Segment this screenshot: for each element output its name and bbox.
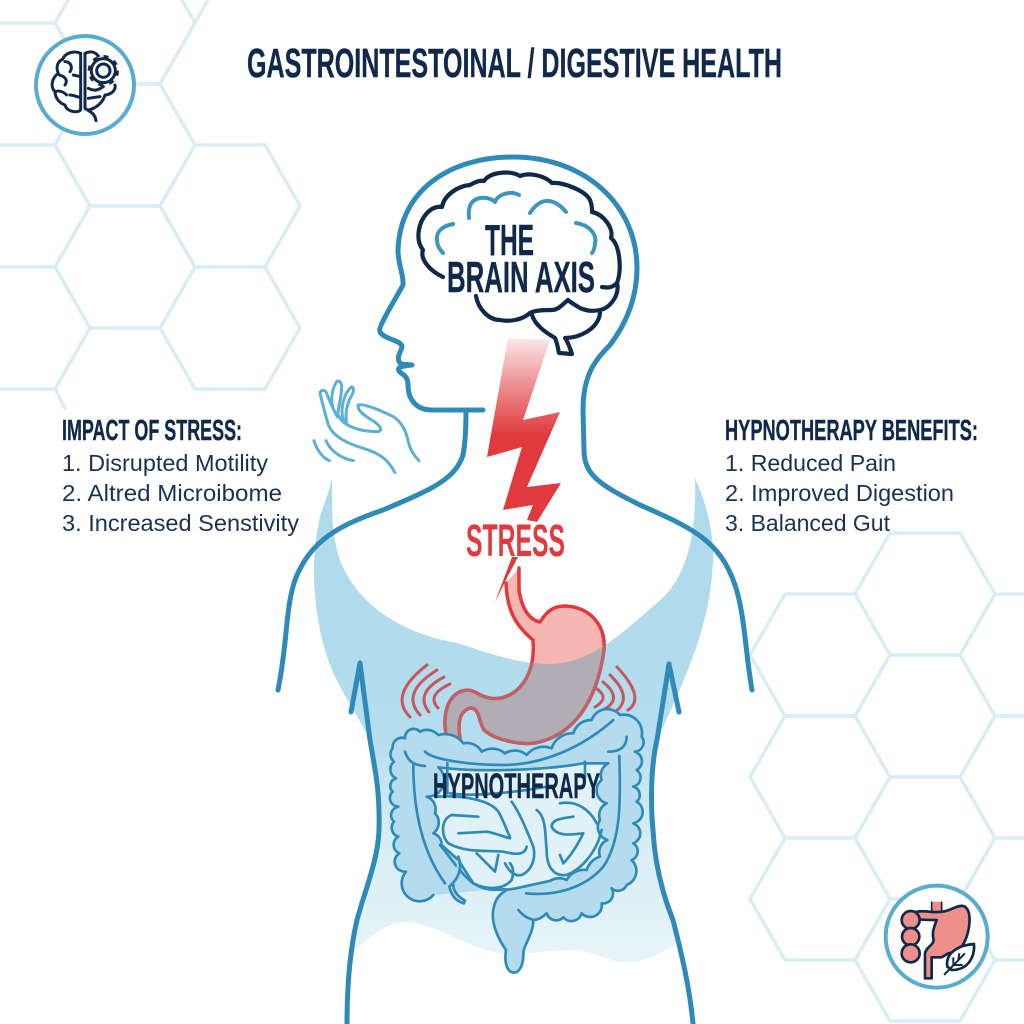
panel: impact of stress: 2. Altred Microibome	[62, 480, 282, 506]
large intestine	[390, 709, 644, 973]
small intestine folds	[437, 762, 602, 888]
icon: hand	[314, 381, 419, 473]
hexagon pattern top left	[0, 0, 300, 410]
brain	[418, 173, 620, 354]
panel: hypnotherapy benefits: 3. Balanced Gut	[725, 510, 891, 536]
right torso line	[652, 664, 693, 1024]
panel: impact of stress	[62, 415, 299, 536]
appendix	[449, 857, 465, 903]
stress label: STRESS	[466, 515, 565, 566]
panel: impact of stress: 1. Disrupted Motility	[62, 450, 268, 476]
panel: impact of stress: 3. Increased Senstivity	[62, 510, 299, 536]
icon: brain and gear badge	[36, 36, 134, 134]
stomach	[445, 568, 604, 743]
panel: impact of stress: IMPACT OF STRESS:	[62, 415, 242, 447]
stomach vibration arcs	[402, 665, 635, 717]
panel: hypnotherapy benefits	[725, 415, 978, 536]
icon: gut and leaf badge	[886, 886, 988, 988]
panel: hypnotherapy benefits: 1. Reduced Pain	[725, 450, 896, 476]
brain label: THE	[485, 216, 534, 265]
intestines	[390, 709, 644, 973]
stress lightning bolt	[487, 338, 561, 522]
panel: hypnotherapy benefits: 2. Improved Digestion	[725, 480, 954, 506]
torso blue fill	[314, 478, 713, 962]
inner abdomen area	[427, 763, 608, 890]
hexagon pattern bottom right	[750, 533, 1024, 1021]
brain label: BRAIN AXIS	[447, 253, 595, 302]
head and shoulders outline	[278, 157, 752, 1024]
brain label	[447, 216, 595, 302]
left torso line	[347, 663, 379, 1024]
colon inner lines	[405, 720, 627, 920]
hypnotherapy label: HYPNOTHERAPY	[433, 767, 600, 806]
bolt shard	[495, 557, 518, 602]
